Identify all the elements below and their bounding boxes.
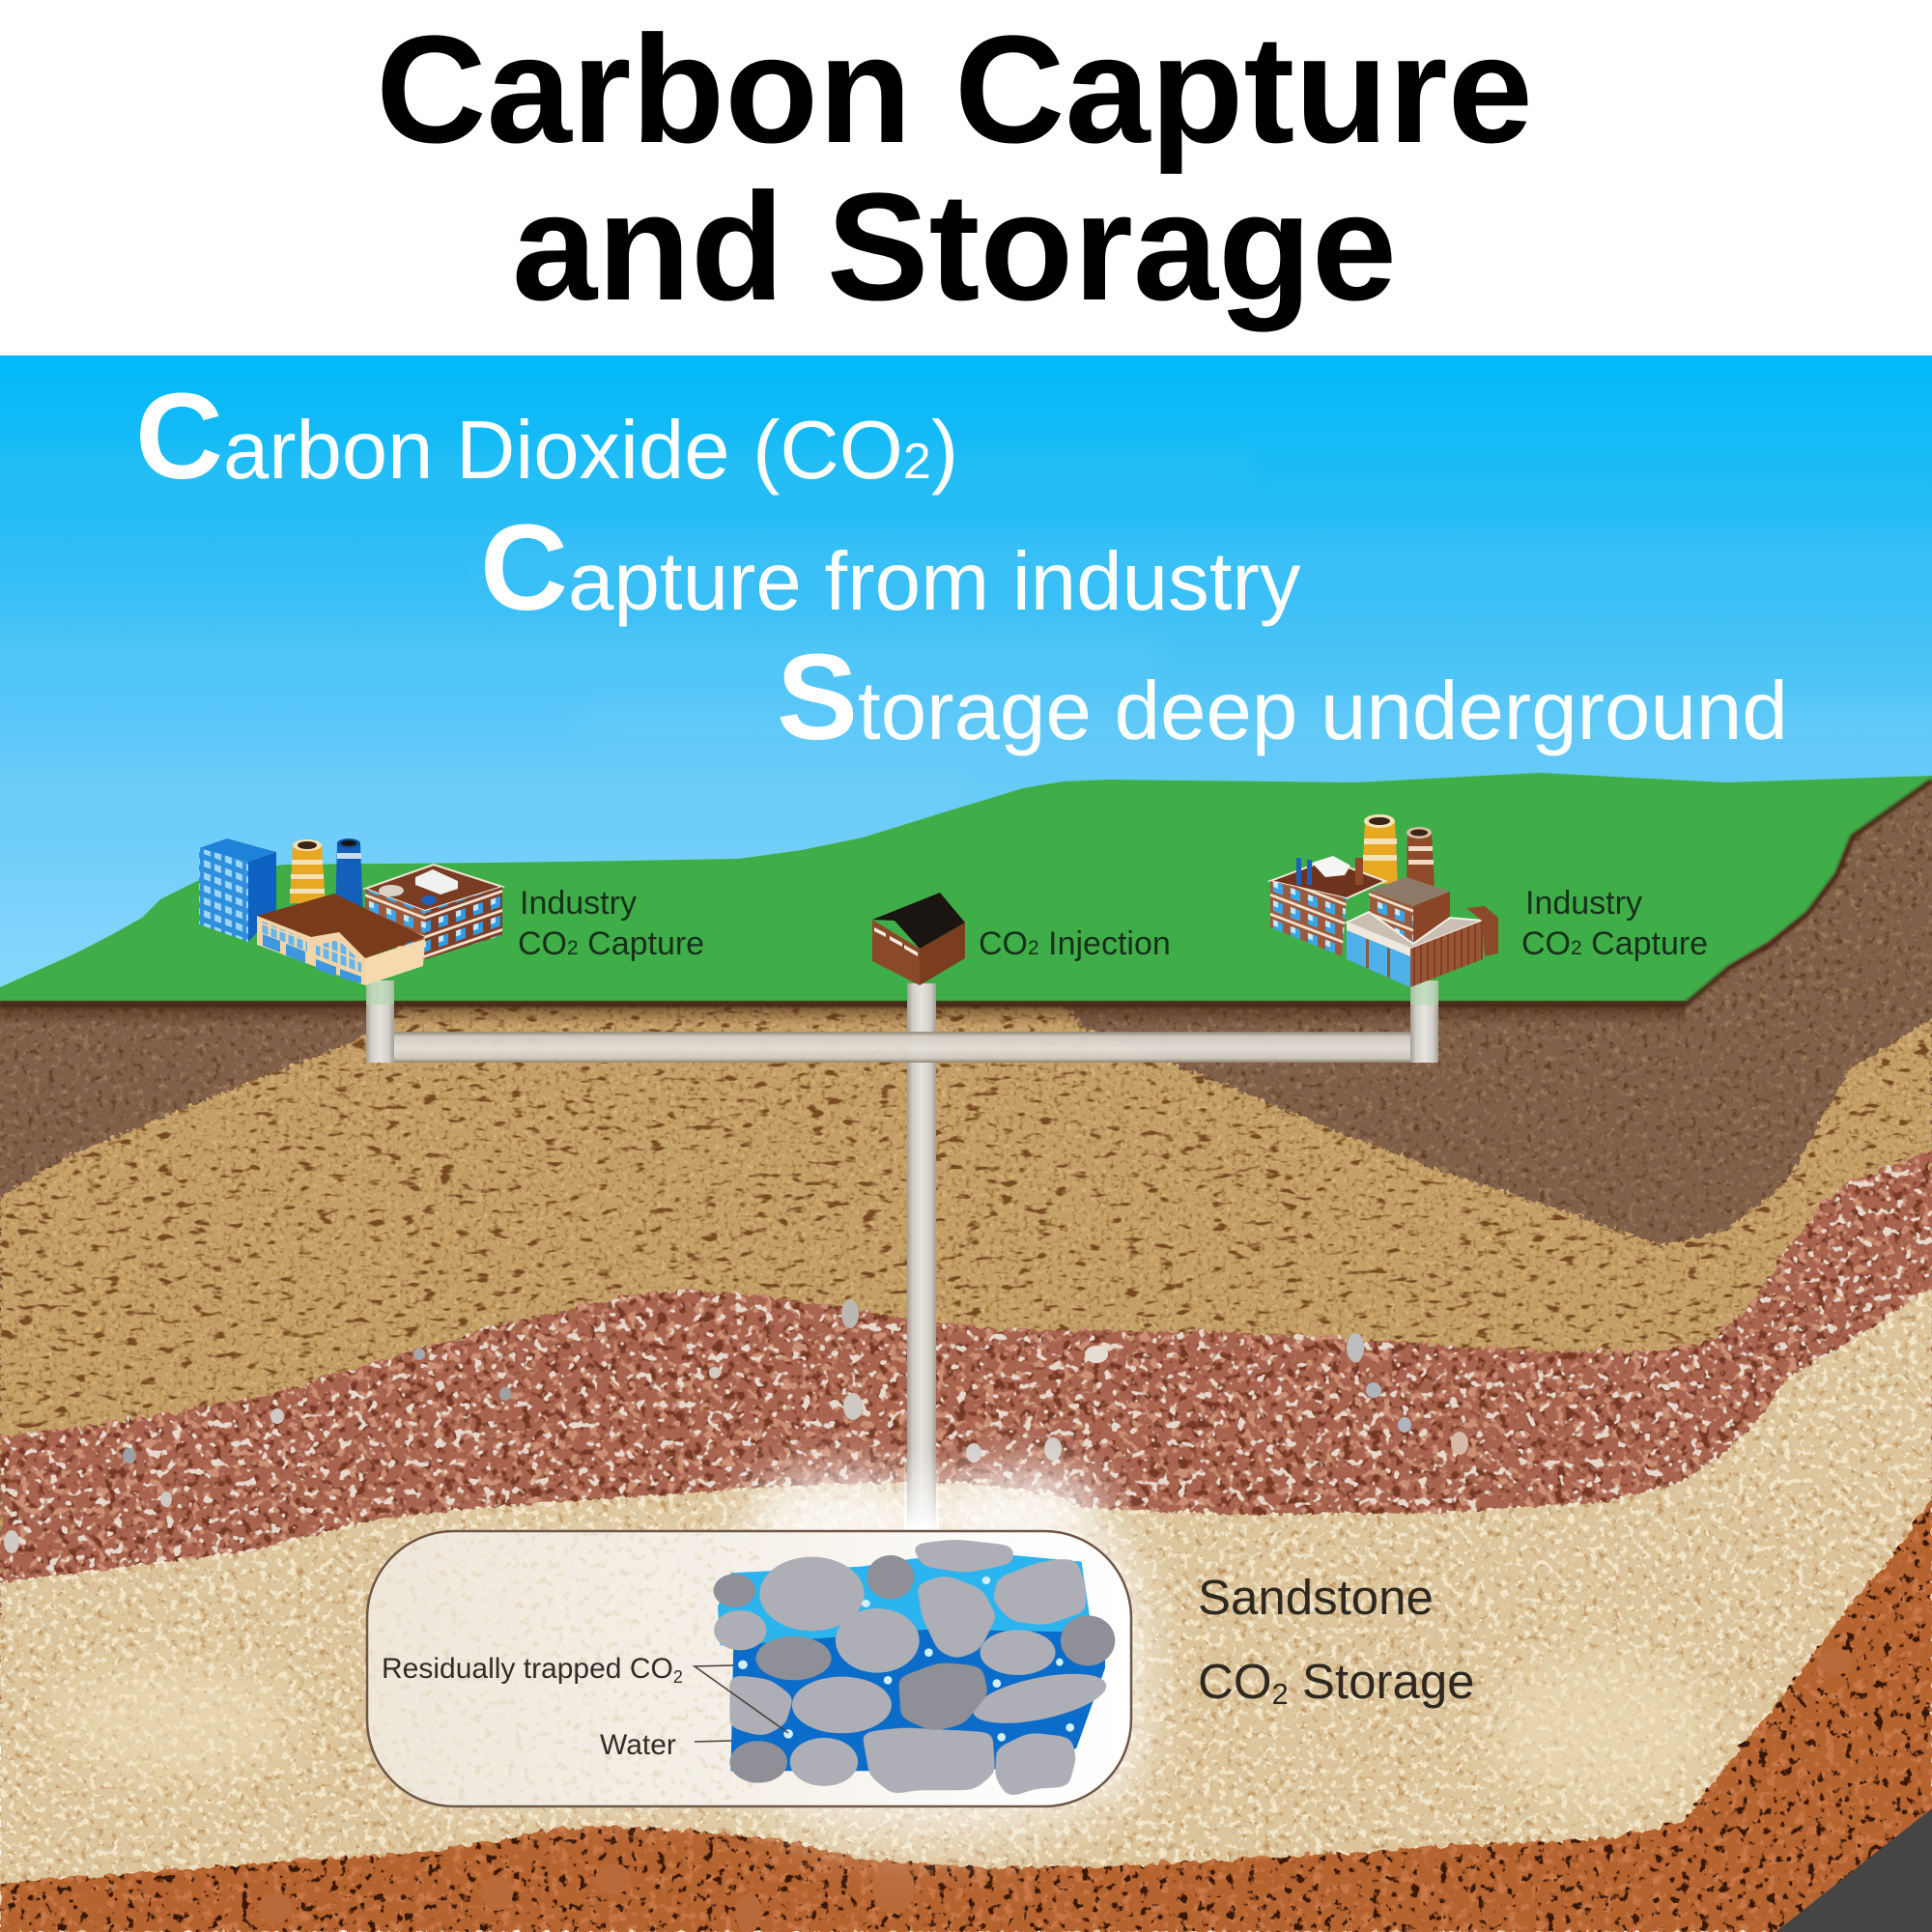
pipe: left capture riser bbox=[366, 980, 394, 1063]
grey pebbles in gravel bbox=[4, 1299, 1755, 1553]
label: residually trapped CO2: 2 bbox=[673, 1667, 683, 1687]
acronym heading: carbon dioxide, capture, storage: Capture from industry bbox=[480, 499, 1301, 636]
yellow chimney bbox=[1362, 814, 1398, 884]
tower block bbox=[1369, 877, 1450, 944]
ground line shadow bbox=[0, 781, 1932, 1005]
trapped CO2 bubbles bbox=[738, 1577, 1074, 1742]
label: water: Water bbox=[600, 1729, 676, 1761]
label: left industry bbox=[518, 885, 704, 962]
pale sandstone patches bbox=[48, 1652, 1719, 1806]
label: sandstone CO2 storage: Sandstone bbox=[1198, 1570, 1434, 1625]
label: residually trapped CO2: Residually trapped CO bbox=[382, 1653, 673, 1685]
label: right industry bbox=[1521, 885, 1708, 962]
storage glow bbox=[425, 1468, 1150, 1845]
label: sandstone CO2 storage bbox=[1198, 1570, 1475, 1711]
panel: pore-scale storage inset bbox=[367, 1531, 1131, 1806]
dark basement corner bbox=[1776, 1808, 1932, 1932]
brown chimney bbox=[1406, 827, 1435, 889]
grains bbox=[714, 1539, 1118, 1799]
pipe network bbox=[366, 980, 1438, 1531]
pore water: saturated zone bbox=[730, 1630, 1105, 1771]
label: left industry: Industry bbox=[520, 885, 637, 922]
label: sandstone CO2 storage: Storage bbox=[1289, 1654, 1475, 1709]
leader lines bbox=[695, 1665, 788, 1742]
acronym heading: carbon dioxide, capture, storage: Carbon Dioxide (CO2) bbox=[135, 368, 958, 504]
soil layer: red gravel bbox=[0, 1151, 1932, 1739]
soil layer: red-orange base bbox=[0, 1495, 1932, 1932]
label: left industry: CO2 Capture bbox=[518, 925, 704, 962]
pipe: right capture riser bbox=[1410, 980, 1438, 1063]
acronym heading: carbon dioxide, capture, storage: Storage deep underground bbox=[777, 629, 1788, 765]
sky bbox=[0, 355, 1932, 1012]
label: right industry: CO2 Capture bbox=[1521, 925, 1708, 962]
icon: CO2 injection house bbox=[872, 893, 965, 985]
acronym heading: carbon dioxide, capture, storage bbox=[135, 368, 1788, 765]
brick office block bbox=[1270, 856, 1385, 956]
blue chimney bbox=[335, 838, 363, 918]
soil layer: tan bbox=[0, 1006, 1932, 1642]
white title background bbox=[0, 0, 1932, 357]
blue tower bbox=[199, 838, 276, 942]
rock clods in base layer bbox=[258, 1648, 1853, 1932]
title: and Storage bbox=[512, 161, 1397, 332]
yellow chimney bbox=[290, 839, 326, 903]
green land surface bbox=[0, 773, 1932, 1024]
soil layer: sandstone bbox=[0, 1287, 1932, 1932]
brick office block bbox=[365, 865, 502, 959]
title bbox=[376, 4, 1533, 332]
pipe: horizontal collector bbox=[394, 1032, 1410, 1063]
label: sandstone CO2 storage: 2 bbox=[1271, 1677, 1289, 1711]
pore water: light CO2 zone bbox=[718, 1555, 1092, 1645]
rock grains and pore water bbox=[714, 1539, 1118, 1799]
long factory hall bbox=[257, 894, 425, 985]
icon: right industry plant bbox=[1270, 814, 1498, 987]
pipe: main injection well bbox=[904, 983, 939, 1531]
surface soil shading bbox=[0, 1001, 1686, 1026]
soil layer: dark brown bbox=[0, 781, 1932, 1642]
title: Carbon Capture bbox=[376, 4, 1533, 175]
label: sandstone CO2 storage: CO bbox=[1198, 1654, 1271, 1709]
label: right industry: Industry bbox=[1525, 885, 1642, 922]
label: CO2 injection: CO2 Injection bbox=[979, 925, 1171, 962]
icon: left industry plant bbox=[199, 838, 502, 985]
podium and annex bbox=[1347, 906, 1498, 987]
